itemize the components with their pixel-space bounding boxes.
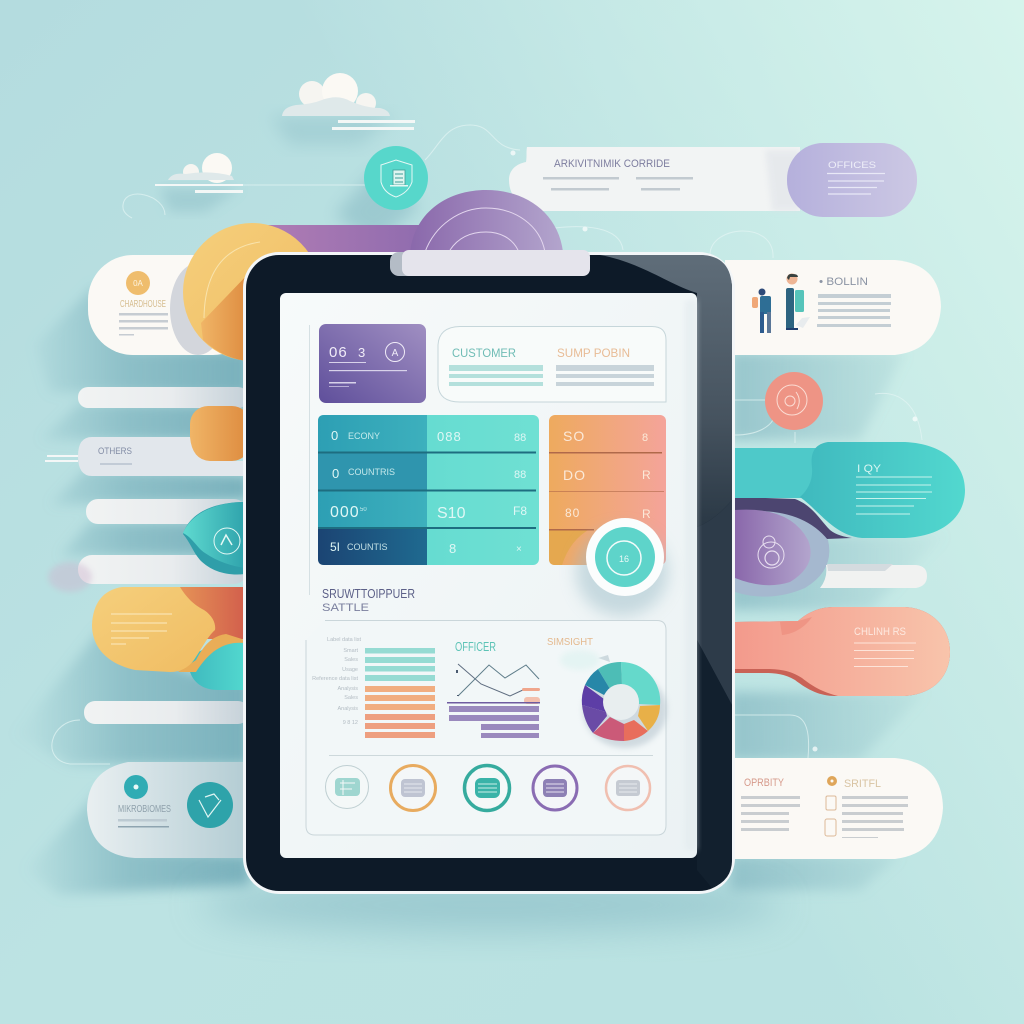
card: purple stat: 3 [358, 345, 365, 360]
icon: purple blob [735, 510, 829, 597]
bottom shadow [200, 879, 780, 931]
icon: ring orange [390, 766, 436, 810]
panel: salmon card [735, 607, 950, 696]
chart: horizontal bars [312, 637, 435, 738]
purple band [262, 225, 432, 265]
table: teal data: 88 [514, 432, 526, 444]
panel: teal card [735, 442, 965, 538]
table: teal data: 088 [437, 429, 462, 444]
heading: left column: OPRBITY [744, 777, 785, 789]
icon: ring purple [533, 766, 577, 810]
panel: lower left pill [87, 762, 245, 858]
bar labels: Smart [343, 648, 358, 654]
lavender pill: OFFICES [828, 160, 876, 170]
text lines [118, 819, 167, 822]
bar labels: Usage [342, 667, 358, 673]
table: orange data: DO [563, 467, 586, 483]
bar labels: 9 8 12 [343, 720, 358, 726]
text lines [119, 313, 168, 336]
icon: checkboxes [825, 796, 836, 836]
table: orange data: SO [563, 428, 585, 444]
table: teal data: ECONY [348, 431, 380, 441]
yellow blob [92, 587, 245, 672]
table: teal data: 000 [330, 504, 360, 521]
icon: ring gray [326, 766, 368, 808]
teal lower tab [189, 642, 245, 690]
card: purple stat: 06 [329, 344, 348, 361]
panel: lower right card [725, 758, 943, 859]
table: teal data: F8 [513, 504, 527, 518]
card: purple stat [319, 324, 426, 403]
bar labels: Analysis [338, 706, 358, 712]
pill: lower empty [78, 555, 248, 584]
heading: right column: SRITFL [844, 778, 881, 790]
icon row [326, 766, 650, 810]
purple tab dark base [735, 497, 852, 540]
bar labels: Sales [344, 657, 358, 663]
icon: teal gauge [586, 518, 664, 596]
icon: two people [752, 274, 810, 333]
clip [390, 250, 590, 276]
pill: others: OTHERS [98, 446, 132, 456]
blush smudge [48, 562, 92, 592]
panel: people card [725, 260, 941, 355]
table: orange data: R [642, 507, 651, 521]
table: teal data: S10 [437, 505, 466, 522]
heading: summary: SUMP POBIN [557, 346, 630, 360]
bar labels: Analysis [338, 686, 358, 692]
table: teal data: 50 [360, 507, 367, 513]
icon: small orange circle: 0A [133, 279, 144, 288]
icon: teal document badge [364, 146, 428, 210]
heading: donut title: SIMSIGHT [547, 637, 593, 648]
screen [280, 293, 697, 858]
table: teal data [318, 415, 539, 565]
bar labels: Sales [344, 695, 358, 701]
pill: middle empty [86, 499, 246, 524]
heading: I QY [857, 463, 882, 475]
heading: officer: OFFICER [455, 639, 496, 654]
card: purple stat: A [392, 348, 399, 359]
tablet body [243, 252, 735, 894]
decorative connector lines [52, 125, 922, 764]
small cloud [155, 153, 243, 193]
table: teal data: 0 [332, 466, 339, 481]
large cloud [282, 73, 415, 130]
icon: ring peach [606, 766, 650, 810]
table: teal data: COUNTIS [347, 542, 388, 552]
screen inner glow edge [685, 300, 697, 850]
icon: small orange circle [126, 271, 150, 295]
chart: donut [560, 650, 667, 748]
panel: left top white pill [88, 255, 258, 355]
panel: top banner [509, 143, 917, 217]
heading: section title: SRUWTTOIPPUER [322, 586, 415, 601]
table: teal data: × [516, 544, 522, 555]
heading: • BOLLIN [819, 276, 868, 288]
pill: bottom empty [84, 701, 249, 724]
gloss reflections [600, 255, 732, 527]
card: customer summary [438, 326, 666, 402]
table: orange data [549, 415, 666, 565]
tablet [243, 250, 735, 894]
yellow semi-circle tab [183, 223, 321, 361]
bar labels [312, 637, 361, 726]
heading: customer: CUSTOMER [452, 346, 516, 360]
heading: MIKROBIOMES [118, 804, 171, 815]
diagonal cast shadows [15, 116, 945, 931]
table: teal data: 5I [330, 540, 340, 554]
text lines [817, 294, 891, 327]
icon: orange dot [827, 776, 837, 786]
teal blob icon [183, 502, 245, 574]
bar labels: Label data list [327, 637, 361, 643]
icon: stethoscope circle [187, 782, 233, 828]
table: orange data: 80 [565, 506, 580, 520]
table: teal data: 0 [331, 428, 338, 443]
heading: section title: SATTLE [322, 602, 369, 614]
chart: line chart [447, 664, 540, 704]
icon: small teal circle [124, 775, 148, 799]
right panels [725, 260, 965, 859]
heading: banner title: ARKIVITNIMIK CORRIDE [554, 158, 670, 170]
heading: section title [322, 586, 415, 614]
bar labels: Reference data list [312, 676, 358, 682]
pill: empty right [820, 565, 927, 588]
table: teal data: 88 [514, 469, 526, 481]
heading: left top pill: CHARDHOUSE [120, 299, 166, 310]
pill: upper empty [78, 387, 248, 408]
red tab [170, 587, 245, 639]
chart: purple bars [449, 706, 539, 738]
heading: CHLINH RS [854, 626, 906, 638]
icon: teal gauge: 16 [619, 554, 629, 564]
table: orange data: R [642, 468, 651, 482]
lavender pill [787, 143, 917, 217]
orange tab [190, 406, 250, 461]
icon: ring teal [464, 766, 510, 810]
text lines: banner [543, 177, 693, 190]
panel: analytics [306, 620, 667, 835]
gauge shadow [576, 528, 668, 616]
icon: coral badge [765, 372, 823, 430]
pill: others [45, 437, 245, 476]
table: orange data: 8 [642, 432, 648, 444]
table: teal data: 8 [449, 541, 456, 556]
table: teal data: COUNTRIS [348, 467, 395, 477]
left pills [45, 387, 250, 858]
purple dome [410, 190, 563, 252]
